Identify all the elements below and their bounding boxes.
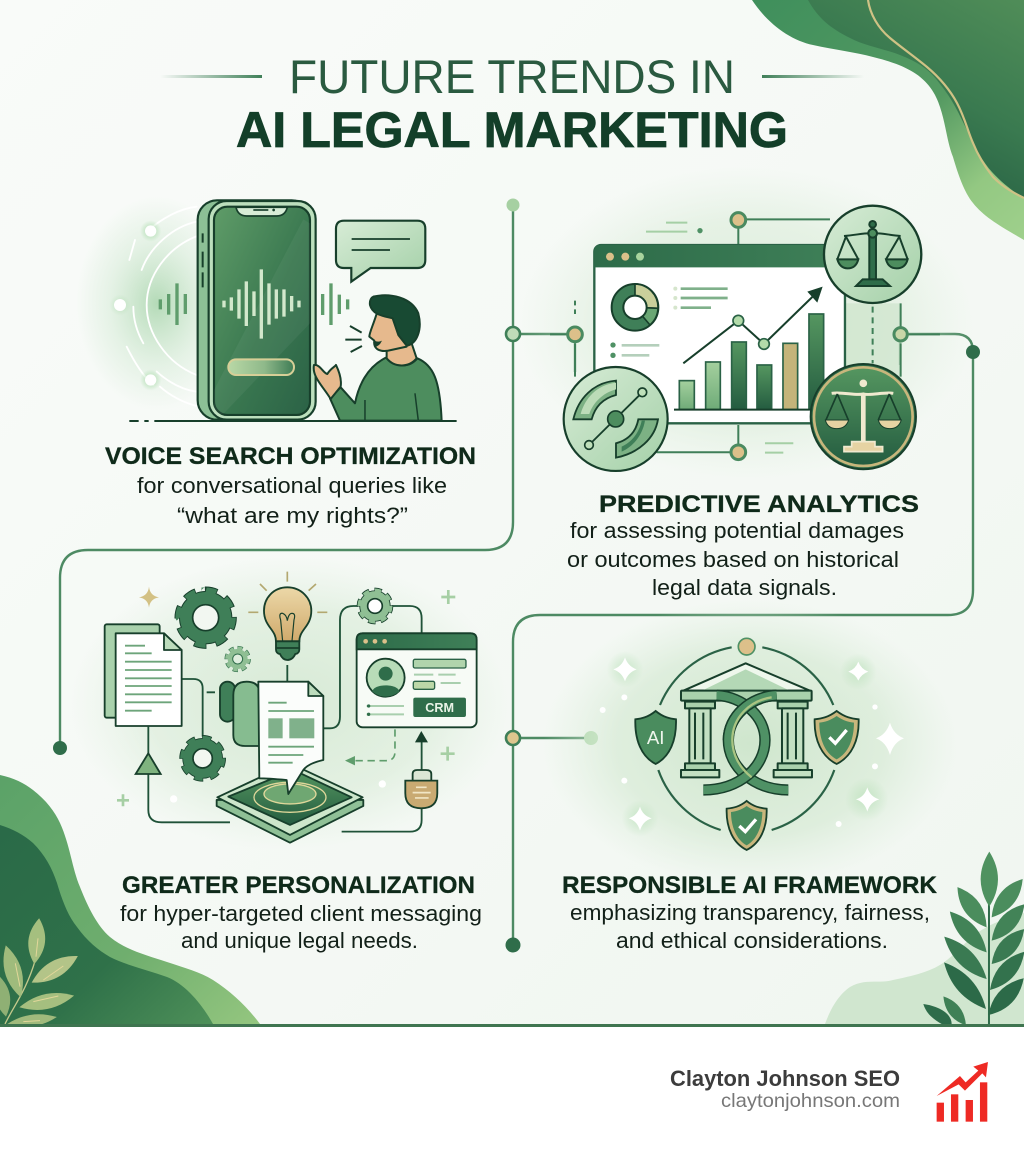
platform — [217, 763, 363, 843]
icon: temple columns — [681, 663, 812, 777]
deco ticks — [646, 223, 793, 453]
icon: light bulb — [248, 572, 327, 660]
text: predictive analytics body: legal data signals. — [652, 575, 837, 600]
node: top dot — [506, 198, 520, 212]
footer — [0, 1024, 1024, 1154]
icon: check shield bottom — [727, 801, 767, 850]
panel: CRM window — [357, 633, 477, 727]
icon: AI shield: AI — [647, 727, 664, 748]
heading: responsible AI — [562, 872, 938, 953]
heading: personalization: GREATER PERSONALIZATION — [122, 872, 475, 899]
node: bottom end dot — [506, 938, 520, 952]
heading: voice search: VOICE SEARCH OPTIMIZATION — [105, 443, 476, 470]
text: personalization body: and unique legal needs. — [181, 928, 418, 953]
node: left end dot — [53, 741, 67, 755]
icon: scroll page — [220, 682, 323, 794]
decoration: bottom right plant — [825, 852, 1024, 1029]
icon: documents — [105, 624, 182, 726]
icon: red chart logo — [937, 1062, 988, 1122]
title: FUTURE TRENDS IN — [289, 50, 735, 103]
glowing dots — [109, 220, 161, 391]
browser window — [594, 245, 845, 423]
text: brand url: claytonjohnson.com — [721, 1090, 900, 1112]
bar chart — [674, 314, 824, 410]
ring — [658, 647, 834, 830]
heading: predictive analytics: PREDICTIVE ANALYTICS — [599, 491, 919, 518]
text: predictive analytics body — [567, 518, 904, 600]
icon: olive sprig — [0, 917, 82, 1030]
decoration: bottom left wave with sprig — [0, 775, 260, 1030]
icon: arrow up right — [415, 731, 428, 742]
text: brand name: Clayton Johnson SEO — [670, 1066, 900, 1091]
icon: lower gear — [183, 739, 222, 778]
decoration: top right wave — [752, 0, 1024, 240]
icon: check shield right — [815, 711, 859, 764]
text: predictive analytics body: for assessing potential damages — [570, 518, 904, 543]
icon: padlock — [405, 770, 437, 808]
nodes — [568, 213, 907, 460]
panel: responsible AI illustration — [543, 600, 957, 887]
title — [160, 50, 864, 158]
connectors — [148, 606, 422, 832]
trend line — [683, 287, 823, 363]
heading: voice search — [105, 443, 476, 528]
sparkles and pluses — [117, 587, 455, 806]
heading: personalization — [120, 872, 482, 953]
text: predictive analytics body: or outcomes based on historical — [567, 547, 899, 572]
legend lines — [681, 289, 728, 308]
donut chart — [612, 284, 658, 331]
node: gold junction — [506, 731, 520, 745]
panel: CRM window: CRM — [425, 701, 454, 715]
icon: smartphone — [198, 200, 316, 420]
panel: personalization illustration — [70, 557, 510, 850]
icon: speech bubble — [336, 221, 425, 282]
heading: responsible AI: RESPONSIBLE AI FRAMEWORK — [562, 872, 938, 899]
icon: arrow up left — [136, 753, 161, 774]
text: responsible AI body: and ethical considerations. — [616, 928, 888, 953]
ground line — [129, 418, 457, 424]
connector lines and nodes — [53, 198, 980, 952]
text: voice search body — [137, 473, 447, 528]
panel: predictive analytics illustration — [520, 167, 973, 480]
side waves — [160, 283, 348, 325]
sparkles — [600, 651, 904, 837]
icon: data circle — [564, 367, 668, 471]
text: voice search body: “what are my rights?” — [177, 503, 408, 528]
icon: scales of justice, light — [824, 206, 921, 303]
text: personalization body: for hyper-targeted client messaging — [120, 901, 482, 926]
icon: scales of justice, dark — [811, 364, 916, 469]
text: responsible AI body: emphasizing transparency, fairness, — [570, 900, 930, 925]
title: AI LEGAL MARKETING — [236, 102, 788, 158]
node: left junction — [506, 327, 520, 341]
icon: small gear — [227, 648, 249, 670]
text: personalization body — [120, 901, 482, 953]
icon: top right gear — [360, 591, 390, 621]
panel: voice search illustration — [77, 197, 457, 421]
icon: person speaking — [314, 295, 442, 421]
connectors — [550, 219, 940, 452]
sound arcs — [127, 207, 200, 406]
text: responsible AI body — [570, 900, 930, 953]
icon: AI shield — [635, 711, 676, 764]
heading: predictive analytics — [567, 491, 919, 600]
text: voice search body: for conversational queries like — [137, 473, 447, 498]
icon: interlocking knot — [703, 695, 788, 790]
icon: large gear — [180, 592, 232, 644]
node: pale end dot — [584, 731, 598, 745]
node: right end dot — [966, 345, 980, 359]
